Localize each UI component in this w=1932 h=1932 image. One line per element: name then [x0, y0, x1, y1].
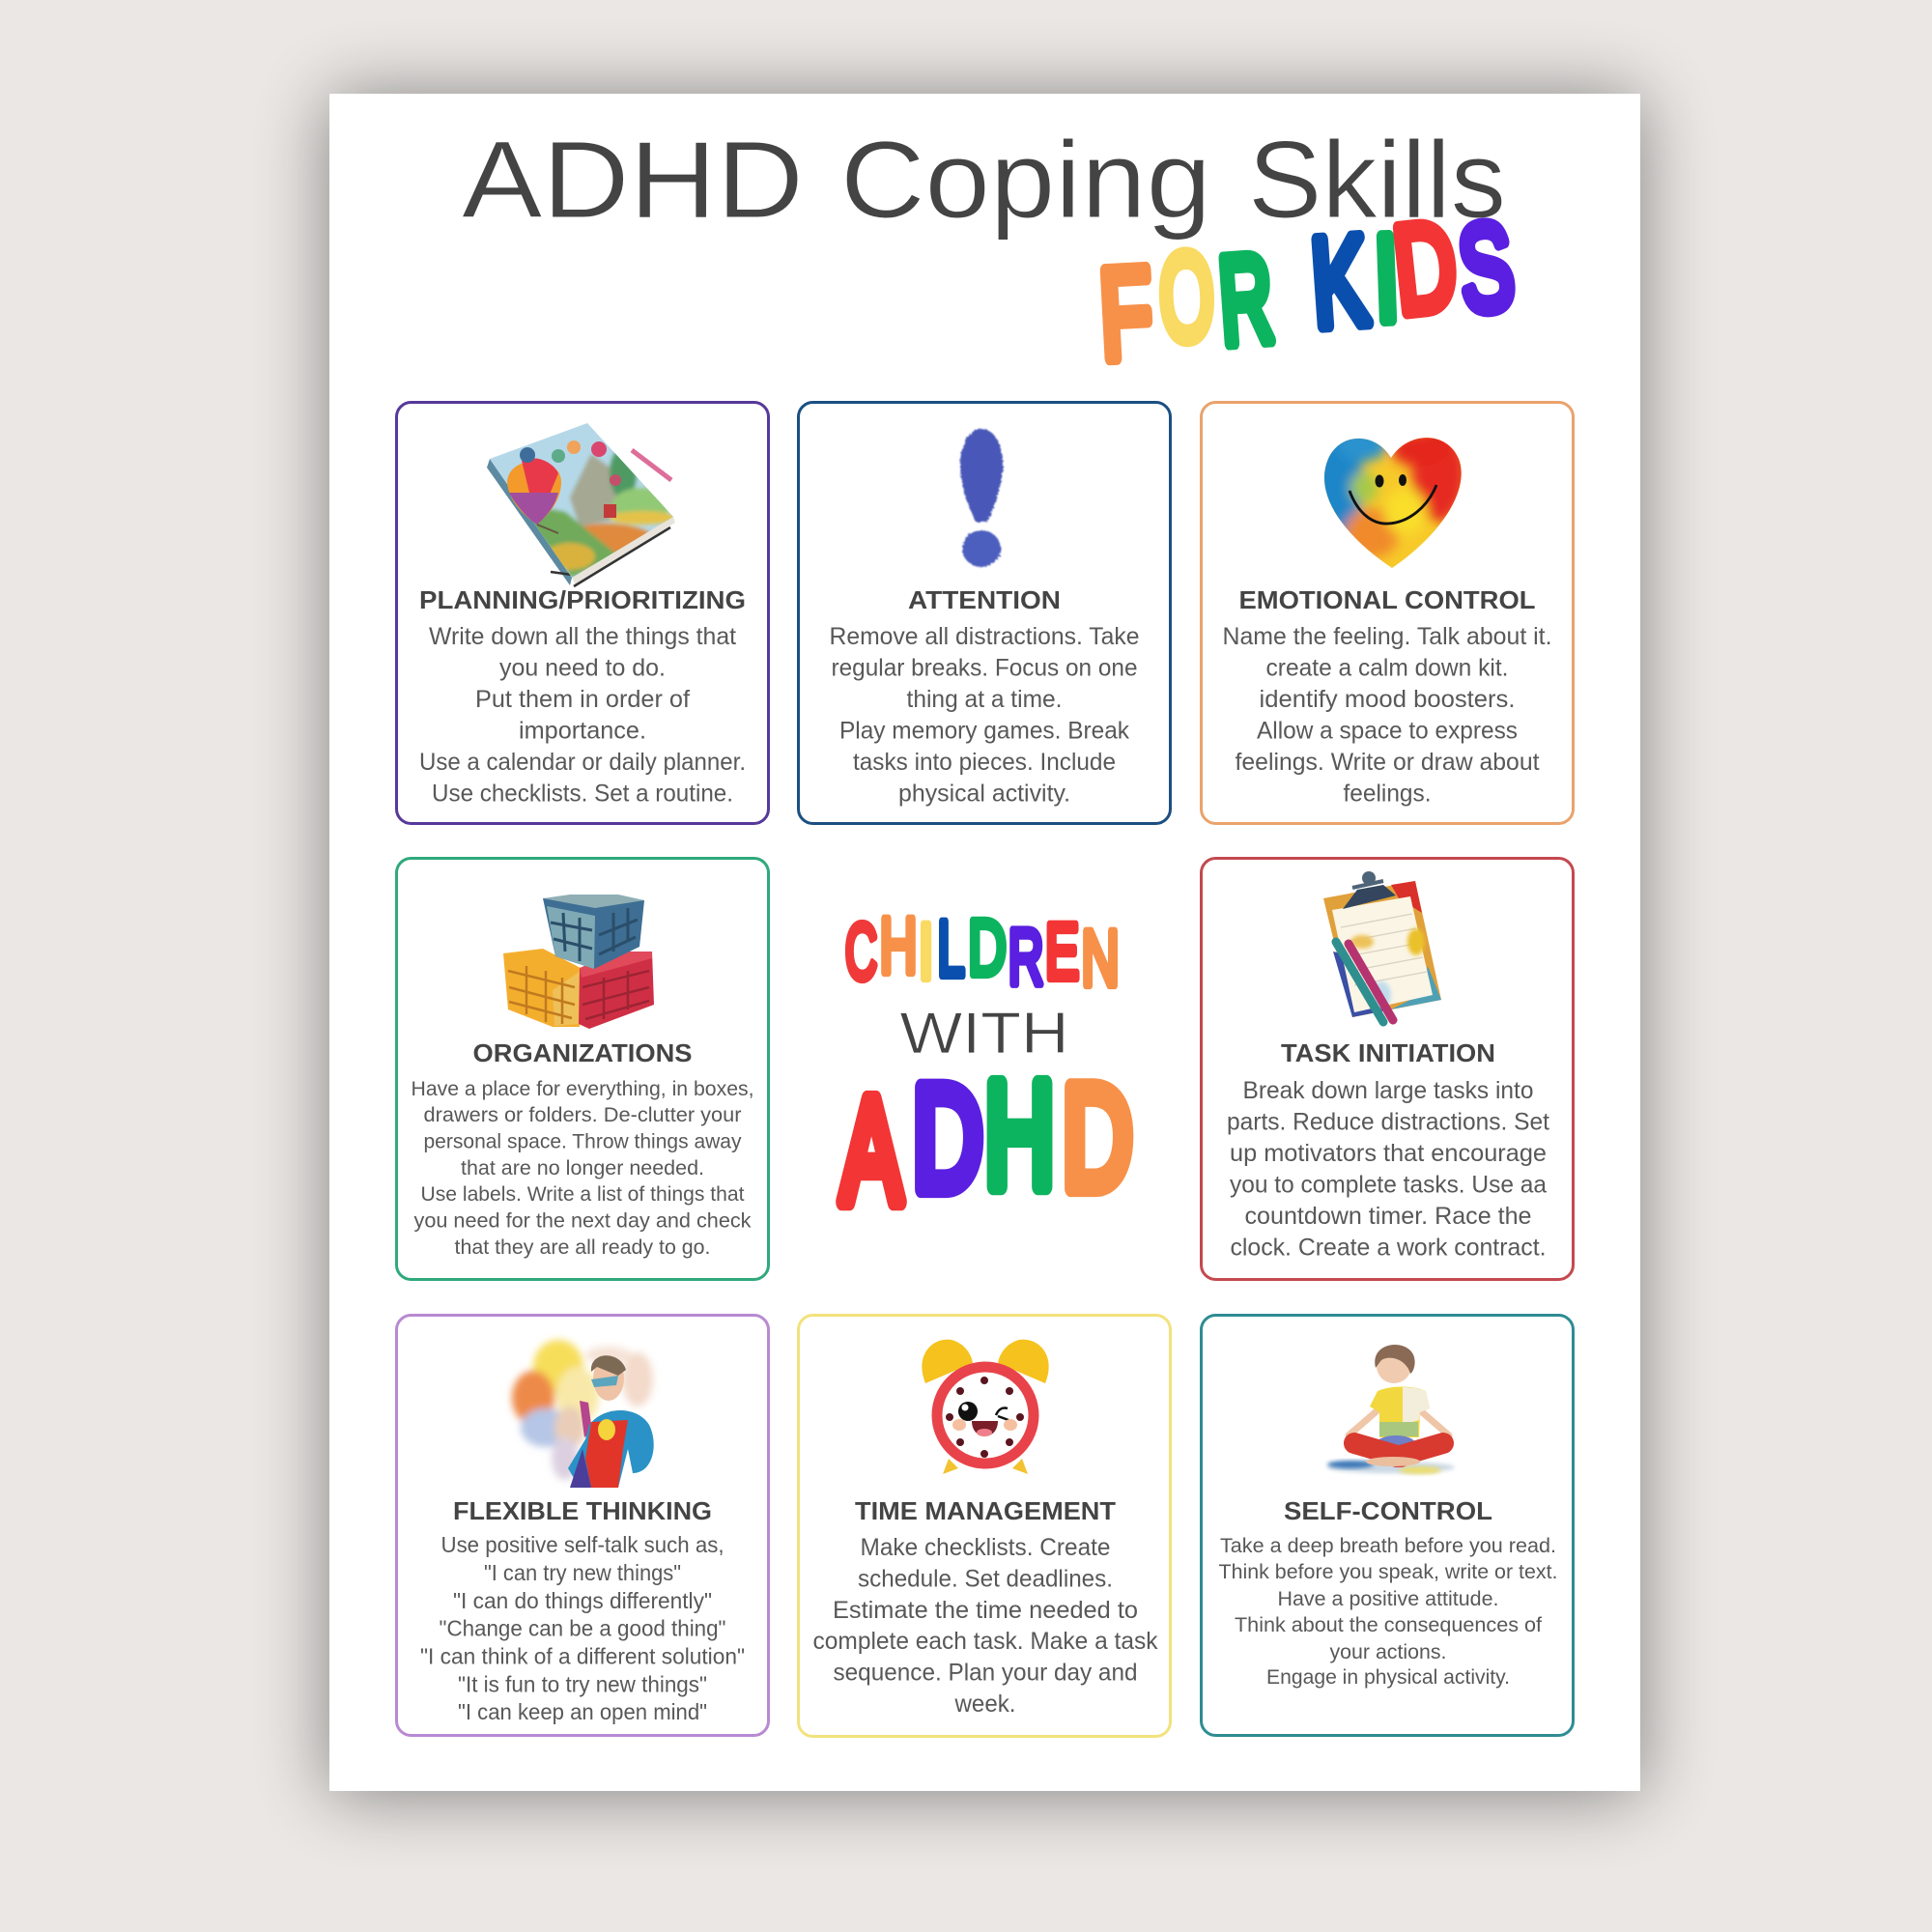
subtitle: for kids: I — [1373, 211, 1401, 347]
icon: clipboard and pens — [1323, 871, 1441, 1022]
children lettering: C — [845, 908, 877, 997]
panel: self-control — [1202, 1316, 1573, 1735]
panel: planning/prioritizing — [396, 402, 769, 823]
panel: flexible thinking — [396, 1316, 769, 1735]
heading: PLANNING/PRIORITIZING — [419, 585, 746, 614]
icon: rainbow smiling heart — [1323, 438, 1462, 568]
heading: TIME MANAGEMENT — [855, 1496, 1116, 1525]
body text: your actions. — [1329, 1640, 1447, 1663]
body text: that they are all ready to go. — [454, 1236, 711, 1259]
body text: Have a positive attitude. — [1277, 1587, 1499, 1610]
body text: parts. Reduce distractions. Set — [1227, 1109, 1549, 1136]
adhd lettering: D — [913, 1057, 982, 1221]
body text — [1227, 1077, 1549, 1262]
title: ADHD — [462, 119, 804, 241]
body text: "It is fun to try new things" — [458, 1671, 707, 1696]
subtitle: for kids — [1096, 197, 1520, 386]
body text: feelings. — [1343, 781, 1432, 808]
icon: stacked baskets — [503, 895, 654, 1029]
body text — [813, 1534, 1158, 1718]
body text — [412, 1077, 753, 1259]
children lettering: E — [1045, 907, 1079, 996]
children lettering: R — [1009, 914, 1043, 1002]
body text: Allow a space to express — [1257, 717, 1518, 744]
body text: you to complete tasks. Use aa — [1230, 1171, 1547, 1198]
title — [462, 119, 1506, 241]
body text: clock. Create a work contract. — [1231, 1235, 1546, 1262]
title: Skills — [1248, 119, 1506, 241]
body text: Estimate the time needed to — [833, 1597, 1138, 1624]
subtitle: for kids: S — [1453, 197, 1520, 338]
body text: drawers or folders. De-clutter your — [423, 1103, 742, 1126]
subtitle: for kids: D — [1388, 197, 1463, 340]
body text: Break down large tasks into — [1242, 1077, 1534, 1104]
body text — [1219, 1534, 1557, 1689]
body text: Have a place for everything, in boxes, — [412, 1077, 753, 1100]
panel: time management — [798, 1316, 1171, 1737]
body text: Think before you speak, write or text. — [1219, 1560, 1557, 1583]
body text — [829, 623, 1140, 808]
body text: complete each task. Make a task — [813, 1628, 1158, 1655]
heading: EMOTIONAL CONTROL — [1238, 585, 1536, 614]
children lettering: H — [880, 901, 917, 990]
children lettering: I — [918, 908, 934, 996]
children lettering: L — [937, 905, 965, 993]
body text: Name the feeling. Talk about it. — [1223, 623, 1551, 650]
body text: countdown timer. Race the — [1244, 1203, 1532, 1230]
body text: physical activity. — [898, 781, 1070, 808]
heading: ATTENTION — [908, 585, 1061, 614]
body text — [420, 1532, 745, 1724]
body text: Take a deep breath before you read. — [1220, 1534, 1556, 1557]
heading: SELF-CONTROL — [1284, 1496, 1492, 1525]
body text: Make checklists. Create — [860, 1534, 1111, 1561]
body text: identify mood boosters. — [1260, 686, 1515, 713]
body text: sequence. Plan your day and — [833, 1660, 1138, 1687]
body text: "I can think of a different solution" — [420, 1644, 745, 1669]
body text: "I can keep an open mind" — [458, 1699, 707, 1724]
body text: Engage in physical activity. — [1266, 1665, 1510, 1689]
icon: meditating child — [1327, 1345, 1455, 1474]
body text: you need to do. — [499, 655, 666, 682]
body text: Use a calendar or daily planner. — [419, 749, 746, 776]
body text: Remove all distractions. Take — [829, 623, 1140, 650]
body text: Think about the consequences of — [1235, 1613, 1542, 1636]
body text: Use checklists. Set a routine. — [432, 781, 733, 808]
body text: you need for the next day and check — [413, 1209, 752, 1233]
icon: superhero thinking — [512, 1340, 654, 1488]
body text: Play memory games. Break — [839, 717, 1129, 744]
sheet shadow — [329, 97, 1640, 1794]
panel: organizations — [396, 858, 769, 1279]
adhd lettering: D — [1063, 1057, 1132, 1220]
children lettering — [845, 901, 1120, 1003]
subtitle: for kids: F — [1096, 241, 1155, 386]
body text: "Change can be a good thing" — [439, 1615, 726, 1640]
panel: attention — [798, 402, 1171, 823]
body text — [419, 623, 746, 808]
with: WITH — [900, 1001, 1068, 1065]
panel: emotional control — [1202, 402, 1573, 823]
icon: fuzzy exclamation mark — [960, 429, 1003, 567]
heading: TASK INITIATION — [1281, 1038, 1495, 1067]
heading: ORGANIZATIONS — [473, 1038, 692, 1067]
body text: "I can try new things" — [484, 1560, 681, 1585]
body text: that are no longer needed. — [461, 1156, 704, 1179]
body text: importance. — [519, 717, 646, 744]
body text: create a calm down kit. — [1265, 655, 1509, 682]
body text: feelings. Write or draw about — [1235, 749, 1540, 776]
poster sheet — [329, 94, 1640, 1791]
center: children with adhd — [841, 901, 1132, 1235]
body text: up motivators that encourage — [1230, 1140, 1547, 1167]
body text: thing at a time. — [906, 686, 1063, 713]
body text — [1223, 623, 1551, 808]
subtitle: for kids: R — [1215, 230, 1277, 371]
children lettering: D — [968, 903, 1007, 992]
body text: schedule. Set deadlines. — [858, 1565, 1113, 1592]
panel: task initiation — [1202, 858, 1573, 1279]
children lettering: N — [1081, 914, 1120, 1003]
body text: week. — [954, 1690, 1016, 1718]
body text: Use positive self-talk such as, — [440, 1532, 724, 1557]
title: Coping — [840, 119, 1211, 241]
adhd lettering: H — [984, 1051, 1055, 1218]
body text: personal space. Throw things away — [423, 1130, 742, 1153]
subtitle: for kids: K — [1307, 211, 1373, 354]
subtitle: for kids: O — [1157, 228, 1216, 366]
body text: Use labels. Write a list of things that — [421, 1182, 745, 1206]
heading: FLEXIBLE THINKING — [453, 1496, 712, 1525]
adhd lettering — [841, 1051, 1132, 1235]
body text: "I can do things differently" — [453, 1588, 712, 1613]
adhd lettering: A — [841, 1068, 901, 1235]
icon: watercolor book — [483, 415, 676, 586]
body text: Put them in order of — [475, 686, 690, 713]
icon: winking alarm clock — [922, 1340, 1049, 1474]
body text: tasks into pieces. Include — [853, 749, 1116, 776]
body text: regular breaks. Focus on one — [831, 655, 1138, 682]
body text: Write down all the things that — [429, 623, 736, 650]
